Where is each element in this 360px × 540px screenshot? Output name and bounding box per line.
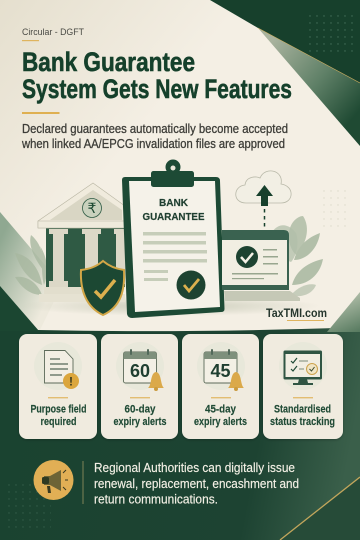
title: System Gets New Features bbox=[22, 74, 292, 104]
subtitle bbox=[21, 121, 288, 151]
card: 60-day expiry alerts bbox=[101, 334, 178, 439]
icon: laptop bbox=[222, 230, 300, 301]
subtitle: when linked AA/EPCG invalidation files are approved bbox=[21, 136, 285, 151]
background: bottom dots bbox=[5, 482, 51, 532]
announcement text: return communications. bbox=[94, 492, 218, 506]
label: Purpose field bbox=[30, 404, 86, 416]
card: purpose field required bbox=[19, 334, 97, 439]
icon: calendar 45 with bell: 45 bbox=[210, 361, 231, 381]
label: required bbox=[40, 416, 76, 428]
icon: bank building bbox=[38, 183, 125, 302]
label: status tracking bbox=[270, 416, 335, 428]
icon: cloud upload bbox=[236, 171, 291, 230]
label bbox=[30, 404, 86, 428]
label: Standardised bbox=[274, 404, 331, 416]
background: floor shadow bbox=[20, 296, 320, 316]
clipboard heading bbox=[142, 197, 204, 223]
label: expiry alerts bbox=[194, 416, 247, 428]
background: bottom right diagonal bbox=[280, 477, 360, 540]
icon: left leaves bbox=[15, 235, 47, 295]
card: 45-day expiry alerts bbox=[182, 334, 259, 439]
icon: right leaves bbox=[272, 216, 323, 296]
title accent bbox=[22, 112, 60, 114]
announcement text: renewal, replacement, encashment and bbox=[94, 476, 299, 491]
icon: megaphone bbox=[34, 460, 74, 500]
clipboard heading: GUARANTEE bbox=[142, 211, 204, 223]
background: cream upper panel bbox=[0, 0, 360, 331]
laptop check bbox=[236, 246, 258, 268]
eyebrow accent bbox=[22, 40, 39, 41]
label: 45-day bbox=[205, 404, 237, 416]
label: 60-day bbox=[124, 404, 156, 416]
background: left dark triangle bbox=[0, 286, 39, 331]
icon: calendar 60 with bell: 60 bbox=[130, 361, 150, 381]
icon: shield bbox=[81, 261, 124, 315]
background: left light triangle bbox=[0, 212, 62, 330]
subtitle: Declared guarantees automatically become accepted bbox=[22, 121, 288, 136]
clipboard approval check bbox=[176, 270, 206, 300]
background: top right dark corner bbox=[210, 0, 360, 83]
card: standardised status tracking bbox=[263, 334, 343, 439]
label bbox=[194, 404, 247, 428]
announcement text bbox=[94, 460, 299, 506]
eyebrow: Circular - DGFT: Circular - DGFT bbox=[22, 27, 84, 38]
clipboard heading: BANK bbox=[159, 197, 188, 209]
icon: monitor with checklist bbox=[284, 350, 322, 385]
label bbox=[114, 404, 166, 428]
clipboard lines bbox=[143, 232, 207, 281]
title: Bank Guarantee bbox=[22, 47, 195, 77]
brand: TaxTMI.com: TaxTMI.com bbox=[266, 308, 327, 320]
icon: clipboard bbox=[122, 160, 224, 318]
divider bbox=[82, 461, 84, 504]
title bbox=[22, 47, 292, 104]
background: top right sheen bbox=[258, 28, 360, 146]
icon: bank building: ₹ bbox=[88, 200, 97, 216]
background: right light triangle bbox=[327, 292, 360, 332]
announcement text: Regional Authorities can digitally issue bbox=[94, 460, 295, 475]
label: expiry alerts bbox=[114, 416, 166, 428]
label bbox=[270, 404, 335, 428]
icon: document with alert: ! bbox=[69, 374, 73, 388]
